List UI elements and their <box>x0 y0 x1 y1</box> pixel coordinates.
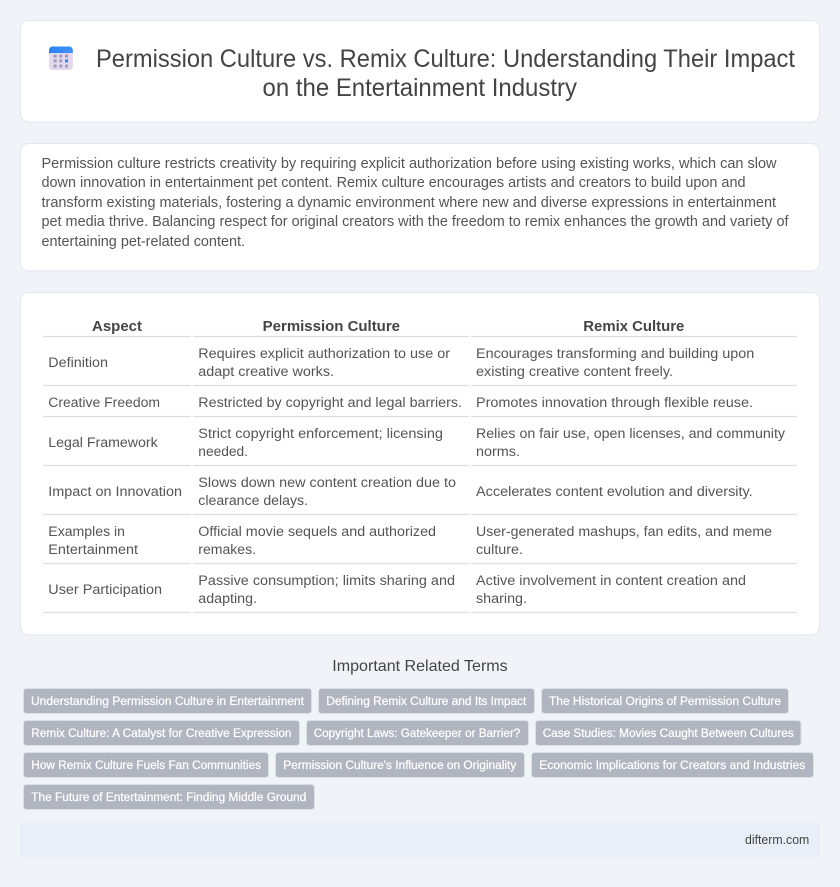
row: impact on innovation: Slows down new content creation due to <box>198 475 456 491</box>
chip <box>536 720 801 746</box>
footer bar: difterm.com <box>745 832 809 847</box>
row: examples in entertainment: culture. <box>476 542 523 558</box>
row: impact on innovation <box>43 475 797 514</box>
intro text block: entertaining pet-related content. <box>42 234 245 250</box>
related terms chips <box>24 688 814 810</box>
chip: Copyright Laws: Gatekeeper or Barrier? <box>314 726 521 740</box>
row: legal framework <box>43 426 797 466</box>
intro text block: Permission culture restricts creativity by requiring explicit authorization before using existing works, which can slow <box>42 156 777 172</box>
panel: comparison table <box>20 292 820 635</box>
icon: calendar <box>49 46 73 70</box>
row: user participation: sharing. <box>476 591 527 607</box>
row: definition: adapt creative works. <box>198 364 334 380</box>
row: legal framework: needed. <box>198 444 248 460</box>
row: user participation: Passive consumption; limits sharing and <box>198 573 455 589</box>
row: user participation: User Participation <box>48 582 162 598</box>
title <box>96 45 795 102</box>
chip <box>24 720 300 746</box>
table header row: Aspect <box>92 319 142 335</box>
row: legal framework: Strict copyright enforcement; licensing <box>198 426 443 442</box>
row: examples in entertainment: Official movie sequels and authorized <box>198 524 436 540</box>
row: legal framework: Relies on fair use, open licenses, and community <box>476 426 786 442</box>
chip: Economic Implications for Creators and Industries <box>539 758 805 772</box>
chip <box>24 688 312 714</box>
chip: How Remix Culture Fuels Fan Communities <box>31 758 261 772</box>
title: Permission Culture vs. Remix Culture: Understanding Their Impact <box>96 45 795 73</box>
row: impact on innovation: Accelerates content evolution and diversity. <box>476 484 753 500</box>
row: definition: Encourages transforming and building upon <box>476 346 754 362</box>
chip: Defining Remix Culture and Its Impact <box>326 694 527 708</box>
row: definition <box>43 346 797 386</box>
row: creative freedom: Restricted by copyright and legal barriers. <box>198 395 462 411</box>
chip <box>24 752 268 778</box>
chip: Permission Culture's Influence on Originality <box>283 758 517 772</box>
chip <box>318 688 534 714</box>
chip: Understanding Permission Culture in Entertainment <box>31 694 305 708</box>
intro text block <box>42 156 789 250</box>
row: legal framework: norms. <box>476 444 520 460</box>
row: creative freedom: Creative Freedom <box>48 395 160 411</box>
row: creative freedom <box>43 395 797 416</box>
chip: The Future of Entertainment: Finding Middle Ground <box>31 790 306 804</box>
intro text block: transform existing materials, fostering a dynamic environment where new and diverse expressions in entertainment <box>42 195 776 211</box>
row: definition: existing creative content freely. <box>476 364 673 380</box>
row: definition: Requires explicit authorization to use or <box>198 346 450 362</box>
row: definition: Definition <box>48 355 108 371</box>
row: examples in entertainment: User-generated mashups, fan edits, and meme <box>476 524 772 540</box>
chip: Case Studies: Movies Caught Between Cultures <box>543 726 794 740</box>
row: examples in entertainment: Examples in <box>48 524 125 540</box>
row: creative freedom: Promotes innovation through flexible reuse. <box>476 395 753 411</box>
title: on the Entertainment Industry <box>262 74 577 102</box>
chip <box>542 688 788 714</box>
table header row <box>43 319 797 336</box>
row: user participation <box>43 573 797 612</box>
footer bar <box>20 823 820 857</box>
row: user participation: adapting. <box>198 591 257 607</box>
row: examples in entertainment: Entertainment <box>48 542 138 558</box>
chip: Remix Culture: A Catalyst for Creative Expression <box>31 726 292 740</box>
chip: The Historical Origins of Permission Culture <box>549 694 781 708</box>
table header row: Permission Culture <box>263 319 400 335</box>
panel: title header <box>20 20 820 122</box>
row: impact on innovation: Impact on Innovation <box>48 484 182 500</box>
chip <box>306 720 528 746</box>
chip <box>24 784 314 810</box>
chip <box>532 752 814 778</box>
row: examples in entertainment <box>43 524 797 564</box>
row: impact on innovation: clearance delays. <box>198 493 308 509</box>
chip <box>276 752 524 778</box>
row: examples in entertainment: remakes. <box>198 542 256 558</box>
intro text block: down innovation in entertainment pet content. Remix culture encourages artists and creators to build upon and <box>42 175 746 191</box>
related terms heading: Important Related Terms <box>332 658 508 675</box>
table header row: Remix Culture <box>583 319 684 335</box>
panel: introduction <box>20 144 820 271</box>
row: user participation: Active involvement in content creation and <box>476 573 746 589</box>
row: legal framework: Legal Framework <box>48 435 159 451</box>
intro text block: pet media thrive. Balancing respect for original creators with the freedom to remix enhances the growth and variety of <box>42 214 789 230</box>
